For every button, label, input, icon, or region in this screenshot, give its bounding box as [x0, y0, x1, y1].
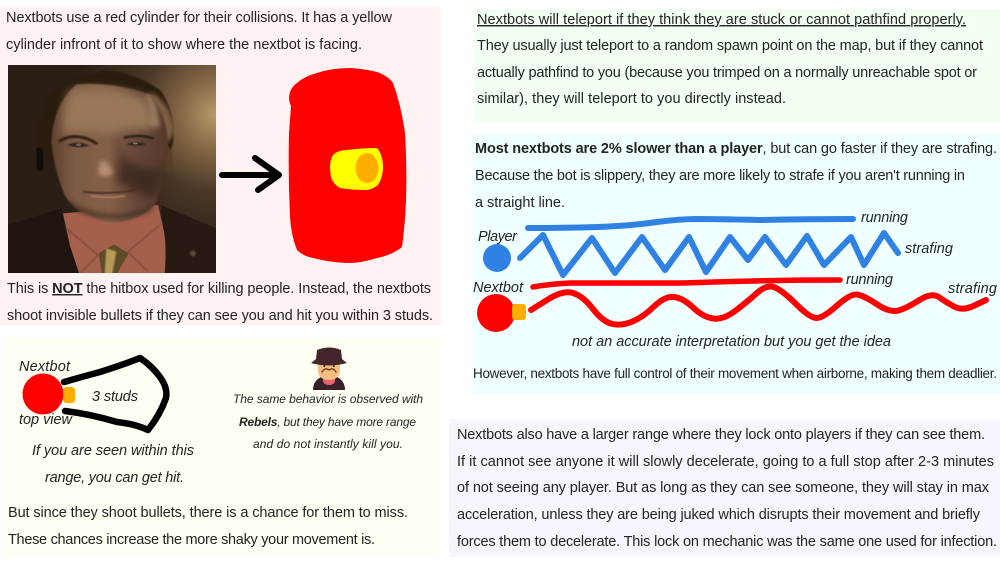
text: hitbox explanation: shoot invisible bullets if they can see you and hit you within 3 studs.	[7, 308, 433, 324]
text: teleport explanation: Nextbots will teleport if they think they are stuck or cannot pathfind properly.	[477, 12, 966, 28]
diagram: player paths: running	[861, 210, 908, 226]
text: rebels note: Rebels, but they have more range	[239, 415, 416, 429]
suit	[8, 208, 80, 275]
text: rebels note	[233, 392, 423, 451]
text: lock on explanation: acceleration, unless they are being juked which disrupts their movement and briefly	[457, 507, 981, 523]
diagram: nextbot paths	[473, 272, 997, 332]
diagram: nextbot paths: running	[846, 272, 893, 288]
hair	[37, 70, 174, 162]
text: lock on explanation: of not seeing any player. But as long as they can see someone, they will stay in max	[457, 480, 990, 496]
text: cylinder intro	[6, 10, 393, 53]
text: airborne note: However, nextbots have full control of their movement when airborne, making them deadlier.	[473, 366, 997, 381]
text: missing shots: But since they shoot bullets, there is a chance for them to miss.	[8, 505, 408, 521]
diagram: 3 stud range top view	[19, 358, 166, 430]
pin	[190, 250, 196, 256]
face	[51, 84, 168, 222]
text: speed intro: a straight line.	[475, 195, 565, 211]
diagram: 3 stud range top view: top view	[19, 412, 74, 428]
tie	[99, 244, 129, 275]
diagram: player paths: Player	[478, 229, 518, 245]
text: missing shots: These chances increase the more shaky your movement is.	[8, 532, 375, 548]
panel: teleport	[473, 9, 1000, 123]
eyes and brows	[60, 137, 96, 143]
panel: speed and strafing	[472, 135, 1000, 395]
text: hitbox explanation	[7, 281, 433, 324]
text: teleport explanation: actually pathfind to you (because you trimped on a normally unreachable spot or	[477, 65, 977, 81]
text: rebels note: The same behavior is observed with	[233, 392, 423, 406]
collar	[66, 228, 98, 273]
text: speed intro	[475, 141, 997, 211]
caption: range	[32, 443, 194, 486]
text: lock on explanation: forces them to decelerate. This lock on mechanic was the same one used for infection.	[457, 534, 997, 550]
text: cylinder intro: Nextbots use a red cylinder for their collisions. It has a yellow	[6, 10, 393, 26]
caption: range: If you are seen within this	[32, 443, 194, 459]
shirt	[63, 205, 166, 275]
icon: rebel character	[311, 348, 347, 390]
diagram: 3 stud range top view: 3 studs	[92, 389, 138, 405]
panel: lock on range	[449, 419, 1000, 557]
text: speed intro: Because the bot is slippery, they are more likely to strafe if you aren't running in	[475, 168, 965, 184]
panel: collision cylinder	[0, 7, 441, 325]
caption: range: range, you can get hit.	[45, 470, 184, 486]
diagram: 3 stud range top view: Nextbot	[19, 359, 71, 375]
panel: hit range	[3, 338, 440, 556]
diagram: player paths	[478, 210, 953, 275]
diagram: nextbot paths: Nextbot	[473, 280, 524, 296]
mouth	[83, 190, 136, 193]
text: teleport explanation: similar), they will teleport to you directly instead.	[477, 91, 786, 107]
text: hitbox explanation: This is NOT the hitbox used for killing people. Instead, the nextbots	[7, 281, 431, 297]
caption: not accurate: not an accurate interpretation but you get the idea	[572, 334, 891, 350]
text: teleport explanation: They usually just teleport to a random spawn point on the map, but if they cannot	[477, 38, 983, 54]
text: rebels note: and do not instantly kill you.	[253, 437, 403, 451]
ear and earpiece	[166, 146, 172, 171]
text: missing shots	[8, 505, 408, 548]
text: cylinder intro: cylinder infront of it to show where the nextbot is facing.	[6, 37, 362, 53]
diagram: nextbot paths: strafing	[948, 281, 997, 297]
text: speed intro: Most nextbots are 2% slower than a player, but can go faster if they are strafing.	[475, 141, 997, 157]
arrow: photo to cylinder	[222, 158, 279, 190]
photo: man in suit portrait	[8, 65, 218, 275]
text: lock on explanation	[457, 427, 997, 550]
diagram: player paths: strafing	[905, 241, 953, 257]
text: teleport explanation	[477, 12, 983, 107]
text: lock on explanation: If it cannot see anyone it will slowly decelerate, going to a full stop after 2-3 minutes	[457, 454, 994, 470]
icon: red cylinder with yellow front	[289, 68, 406, 263]
text: lock on explanation: Nextbots also have a larger range where they lock onto players if they can see them.	[457, 427, 985, 443]
